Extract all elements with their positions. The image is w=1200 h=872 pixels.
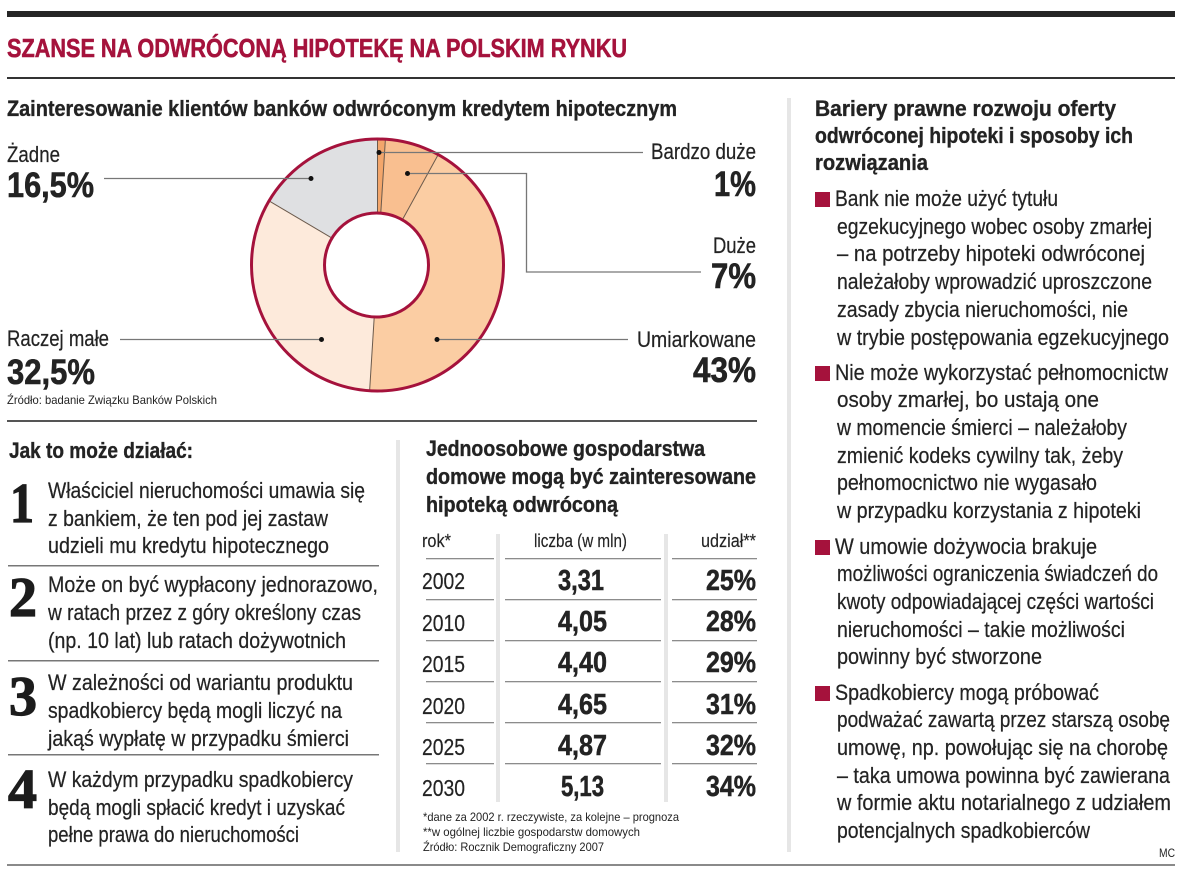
step 1: Właściciel nieruchomości umawia się [48, 478, 365, 503]
row 2002: 25% [706, 565, 756, 597]
label: Bardzo duże 1%: 1% [714, 165, 756, 204]
step 2: 2 [9, 567, 37, 629]
row 2015: 29% [706, 647, 756, 679]
heading: households: Jednoosobowe gospodarstwa [426, 436, 706, 461]
step 2: Może on być wypłacony jednorazowo, [48, 572, 378, 597]
barrier 3 [815, 534, 1158, 669]
row 2015: 2015 [422, 651, 465, 677]
step 2: w ratach przez z góry określony czas [47, 600, 361, 625]
step 1 [10, 473, 365, 558]
label: Żadne 16,5% [7, 142, 314, 205]
barrier 3: W umowie dożywocia brakuje [835, 534, 1097, 559]
row 2025 [422, 730, 756, 762]
label: Duże 7% [405, 171, 756, 296]
step 4: będą mogli spłacić kredyt i uzyskać [48, 795, 345, 820]
row 2010: 2010 [422, 610, 465, 636]
table header: rok* [422, 531, 451, 551]
step 4 [8, 759, 353, 847]
barrier 1 [815, 186, 1169, 350]
row 2020: 31% [706, 689, 756, 721]
row 2025: 32% [706, 730, 756, 762]
panel: how it may work [8, 438, 379, 847]
barrier 2: w przypadku korzystania z hipoteki [836, 498, 1141, 523]
row 2020 [422, 689, 756, 721]
heading: legal barriers: Bariery prawne rozwoju oferty [815, 96, 1117, 121]
row 2030: 2030 [422, 775, 465, 801]
label: Bardzo duże 1% [376, 139, 756, 204]
barrier 2: Nie może wykorzystać pełnomocnictw [835, 360, 1168, 385]
barrier 4: Spadkobiercy mogą próbować [835, 680, 1099, 705]
barrier 2 [815, 360, 1168, 523]
step 2: (np. 10 lat) lub ratach dożywotnich [48, 628, 346, 653]
panel: donut chart section [7, 96, 756, 407]
label: Bardzo duże 1%: Bardzo duże [651, 139, 756, 164]
row 2020: 4,65 [558, 689, 607, 721]
row 2020: 2020 [422, 693, 465, 719]
barrier 1: zasady zbycia nieruchomości, nie [837, 297, 1128, 322]
row 2002: 3,31 [558, 565, 604, 597]
row 2025: 2025 [422, 734, 465, 760]
table header: liczba (w mln) [534, 531, 627, 551]
label: Umiarkowane 43%: Umiarkowane [637, 327, 756, 352]
barrier 2: pełnomocnictwo nie wygasało [837, 470, 1097, 495]
label: Umiarkowane 43% [434, 327, 756, 390]
barrier 4: umowę, np. powołując się na chorobę [837, 735, 1168, 760]
table header: udział** [701, 531, 756, 551]
step 4: W każdym przypadku spadkobiercy [48, 767, 353, 792]
step 1: 1 [10, 473, 34, 535]
label: Duże 7%: Duże [713, 233, 756, 258]
step 3 [9, 666, 353, 751]
step 3: 3 [9, 666, 37, 728]
heading: legal barriers: odwróconej hipoteki i sposoby ich [815, 123, 1133, 148]
footnotes: *dane za 2002 r. rzeczywiste, za kolejne – prognoza [423, 810, 679, 824]
donut chart [252, 139, 504, 391]
row 2030: 34% [706, 771, 756, 803]
barrier 1: egzekucyjnego wobec osoby zmarłej [837, 214, 1152, 239]
step 3: jakąś wypłatę w przypadku śmierci [47, 726, 349, 751]
row 2030 [422, 771, 756, 803]
step 4: pełne prawa do nieruchomości [48, 822, 299, 847]
row 2015: 4,40 [558, 647, 607, 679]
step 3: spadkobiercy będą mogli liczyć na [48, 698, 343, 723]
step 4: 4 [8, 759, 37, 821]
heading: legal barriers: rozwiązania [815, 150, 929, 175]
step 1: z bankiem, że ten pod jej zastaw [48, 506, 328, 531]
panel: legal barriers [815, 96, 1171, 843]
source note: Źródło: badanie Związku Banków Polskich [7, 392, 217, 407]
barrier 2: osoby zmarłej, bo ustają one [837, 387, 1099, 412]
step 2 [9, 567, 378, 653]
title: SZANSE NA ODWRÓCONĄ HIPOTEKĘ NA POLSKIM RYNKU [7, 33, 627, 63]
heading: households: domowe mogą być zainteresowane [426, 464, 756, 489]
heading: how it may work: Jak to może działać: [9, 438, 193, 463]
table header [422, 531, 756, 551]
label: Żadne 16,5%: 16,5% [7, 166, 94, 205]
barrier 1: – na potrzeby hipoteki odwróconej [837, 241, 1145, 266]
row 2015 [422, 647, 756, 679]
label: Raczej małe 32,5%: Raczej małe [7, 326, 109, 351]
footnotes [423, 810, 679, 854]
barrier 3: kwoty odpowiadającej części wartości [837, 589, 1154, 614]
author credit: MC [1159, 846, 1175, 860]
row 2025: 4,87 [558, 730, 607, 762]
barrier 4: potencjalnych spadkobierców [837, 818, 1090, 843]
heading: households [426, 436, 756, 517]
footnotes: Źródło: Rocznik Demograficzny 2007 [423, 839, 604, 854]
label: Raczej małe 32,5%: 32,5% [7, 353, 95, 392]
row 2002: 2002 [422, 568, 465, 594]
label: Umiarkowane 43%: 43% [693, 351, 756, 390]
barrier 3: powinny być stworzone [837, 644, 1042, 669]
row 2010: 28% [706, 606, 756, 638]
barrier 4: w formie aktu notarialnego z udziałem [836, 790, 1171, 815]
row 2010: 4,05 [558, 606, 607, 638]
label: Żadne 16,5%: Żadne [7, 142, 60, 167]
barrier 1: w trybie postępowania egzekucyjnego [836, 325, 1169, 350]
label: Raczej małe 32,5% [7, 326, 324, 392]
barrier 1: Bank nie może użyć tytułu [835, 186, 1058, 211]
heading: legal barriers [815, 96, 1133, 175]
heading: client interest: Zainteresowanie klientów banków odwróconym kredytem hipotecznym [7, 96, 677, 121]
footnotes: **w ogólnej liczbie gospodarstw domowych [423, 825, 640, 839]
heading: households: hipoteką odwróconą [426, 492, 619, 517]
row 2010 [422, 606, 756, 638]
panel: single-person households table [422, 436, 757, 854]
barrier 2: zmienić kodeks cywilny tak, żeby [837, 443, 1123, 468]
barrier 4: – taka umowa powinna być zawierana [837, 763, 1171, 788]
row 2002 [422, 565, 756, 597]
step 3: W zależności od wariantu produktu [48, 670, 353, 695]
barrier 1: należałoby wprowadzić uproszczone [837, 269, 1152, 294]
step 1: udzieli mu kredytu hipotecznego [48, 533, 329, 558]
row 2030: 5,13 [561, 771, 604, 803]
barrier 2: w momencie śmierci – należałoby [836, 415, 1127, 440]
barrier 3: nieruchomości – takie możliwości [837, 617, 1125, 642]
barrier 4 [815, 680, 1171, 843]
label: Duże 7%: 7% [711, 257, 756, 296]
